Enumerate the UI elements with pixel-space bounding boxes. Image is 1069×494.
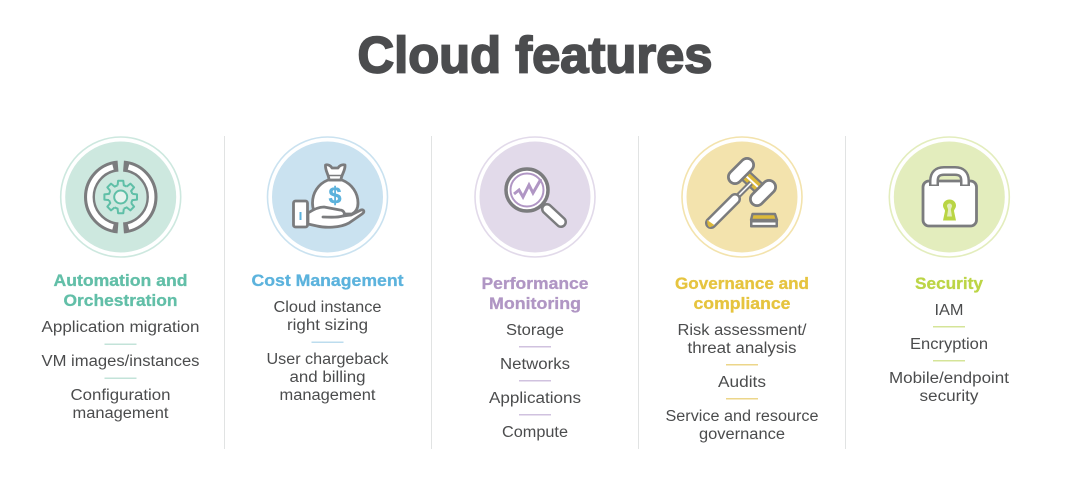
list of items: Compute — [502, 424, 568, 441]
heading: Governance and — [675, 274, 809, 293]
list of items: Cloud instance — [274, 299, 382, 316]
list of items — [42, 319, 200, 422]
panel: performance monitoring — [475, 137, 595, 441]
icon: magnifying glass with chart — [475, 137, 595, 257]
icon: money bag in hand: $ — [329, 182, 342, 208]
heading — [482, 274, 588, 313]
list of items: Mobile/endpoint — [889, 370, 1010, 387]
list of items: IAM — [934, 302, 964, 319]
list of items: governance — [699, 426, 785, 443]
list of items: Applications — [489, 390, 581, 407]
icon: gavel — [682, 137, 802, 257]
panel: governance and compliance — [666, 137, 818, 443]
heading: Performance — [482, 274, 588, 293]
heading: Orchestration — [64, 291, 178, 310]
list of items — [666, 322, 818, 443]
list of items: security — [920, 388, 979, 405]
list of items: Service and resource — [666, 408, 818, 425]
heading: Cost Management — [252, 271, 404, 290]
heading: Security — [915, 274, 984, 293]
list of items — [266, 299, 389, 404]
icon: padlock — [889, 137, 1009, 257]
list of items: Risk assessment/ — [678, 322, 807, 339]
list of items: Audits — [718, 374, 766, 391]
panel: security — [889, 137, 1010, 405]
list of items: Configuration — [70, 387, 170, 404]
list of items: Encryption — [910, 336, 988, 353]
list of items: VM images/instances — [42, 353, 200, 370]
list of items: right sizing — [287, 317, 368, 334]
icon: rotating arrows and gear — [61, 137, 181, 257]
list of items — [489, 322, 581, 441]
list of items — [889, 302, 1010, 405]
heading: Monitoring — [489, 294, 581, 313]
heading — [675, 274, 809, 313]
list of items: Storage — [506, 322, 564, 339]
list of items: and billing — [290, 369, 366, 386]
list of items: Application migration — [42, 319, 200, 336]
list of items: threat analysis — [688, 340, 797, 357]
heading — [54, 271, 188, 310]
heading: Automation and — [54, 271, 188, 290]
list of items: Networks — [500, 356, 570, 373]
list of items: management — [72, 405, 169, 422]
title: Cloud features — [358, 26, 712, 84]
heading: compliance — [694, 294, 790, 313]
list of items: User chargeback — [266, 351, 389, 368]
icon: money bag in hand — [268, 137, 388, 257]
panel: automation and orchestration — [42, 137, 200, 422]
panel: cost management — [252, 137, 404, 404]
list of items: management — [280, 387, 376, 404]
